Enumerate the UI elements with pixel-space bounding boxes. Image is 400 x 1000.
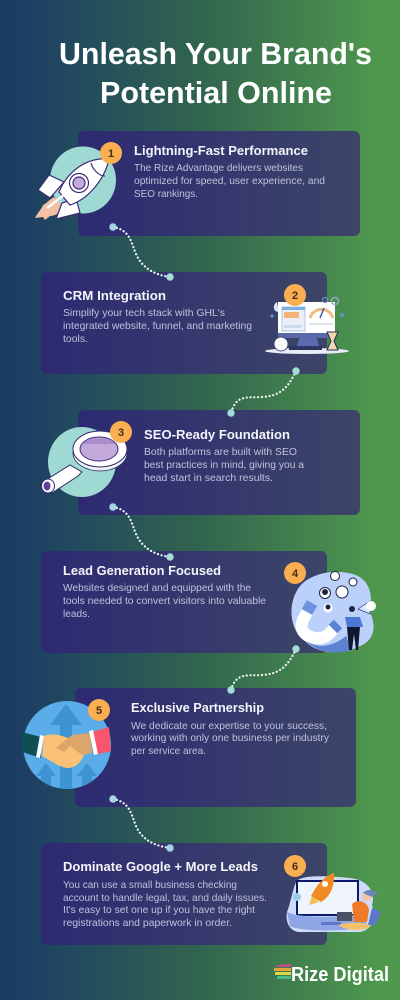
icon: logo stripes (274, 964, 291, 979)
heading: card 4: Lead Generation Focused (63, 563, 221, 578)
title (59, 37, 372, 110)
text block: card 2: Simplify your tech stack with GHL's (63, 308, 225, 319)
text block: card 3 (144, 447, 304, 484)
text block: card 6: account to handle legal, tax, and daily issues. (63, 893, 267, 904)
panel: crm integration (41, 272, 327, 374)
text block: card 2: tools. (63, 334, 88, 345)
text block: card 2: integrated website, funnel, and marketing (63, 321, 252, 332)
icon: badge 2 (284, 284, 306, 306)
panel: lightning-fast performance (78, 131, 360, 236)
text block: card 4: tools needed to convert visitors into valuable (63, 596, 266, 607)
panel: dominate google (41, 843, 327, 945)
text block: card 1 (134, 163, 325, 200)
heading: card 2: CRM Integration (63, 288, 166, 303)
logo: rize digital: Rize Digital (291, 964, 389, 986)
arrow: connector 2 to 3 (227, 367, 300, 417)
icon: laptop and rocket person (287, 873, 381, 932)
icon: badge 4 (284, 562, 306, 584)
icon: badge 5: 5 (96, 705, 102, 717)
heading: card 6: Dominate Google + More Leads (63, 859, 258, 874)
icon: magnifying glass (42, 427, 127, 497)
text block: card 6: registrations and paperwork in order. (63, 918, 232, 929)
heading: card 3: SEO-Ready Foundation (144, 427, 290, 442)
text block: card 6: You can use a small business checking (63, 880, 237, 891)
text block: card 4 (63, 583, 266, 620)
text block: card 1: SEO rankings. (134, 189, 198, 200)
panel: seo-ready foundation (78, 410, 360, 515)
arrow: connector 3 to 4 (109, 503, 174, 561)
text block: card 3: best practices in mind, giving you a (144, 460, 304, 471)
icon: badge 4: 4 (292, 568, 299, 580)
heading: card 1: Lightning-Fast Performance (134, 143, 308, 158)
icon: rocket (35, 146, 116, 220)
icon: badge 6 (284, 855, 306, 877)
icon: badge 6: 6 (292, 861, 298, 873)
title: Unleash Your Brand's (59, 37, 372, 71)
text block: card 1: optimized for speed, user experience, and (134, 176, 325, 187)
icon: badge 2: 2 (292, 290, 298, 302)
text block: card 1: The Rize Advantage delivers websites (134, 163, 303, 174)
text block: card 6: It's easy to set one up if you have the right (63, 905, 255, 916)
text block: card 5: We dedicate our expertise to your success, (131, 721, 327, 732)
text block: card 3: Both platforms are built with SEO (144, 447, 297, 458)
icon: badge 1 (100, 142, 122, 164)
icon: badge 5 (88, 699, 110, 721)
text block: card 3: head start in search results. (144, 473, 273, 484)
icon: monitor dashboard (265, 298, 349, 354)
icon: badge 1: 1 (108, 148, 114, 160)
icon: badge 3: 3 (118, 427, 124, 439)
text block: card 5: per service area. (131, 746, 206, 757)
text block: card 2 (63, 308, 252, 345)
text block: card 4: leads. (63, 609, 90, 620)
text block: card 6 (63, 880, 267, 929)
icon: handshake (22, 701, 111, 792)
title: Potential Online (100, 76, 332, 110)
text block: card 5 (130, 721, 330, 757)
panel: exclusive partnership (75, 688, 356, 807)
icon: badge 3 (110, 421, 132, 443)
arrow: connector 4 to 5 (227, 645, 300, 694)
heading: card 5: Exclusive Partnership (131, 700, 264, 715)
panel: lead generation focused (41, 551, 327, 653)
arrow: connector 1 to 2 (109, 223, 174, 281)
text block: card 4: Websites designed and equipped with the (63, 583, 251, 594)
arrow: connector 5 to 6 (109, 795, 174, 852)
text block: card 5: working with only one business per industry (130, 733, 330, 744)
icon: magnet and megaphone (291, 572, 376, 652)
